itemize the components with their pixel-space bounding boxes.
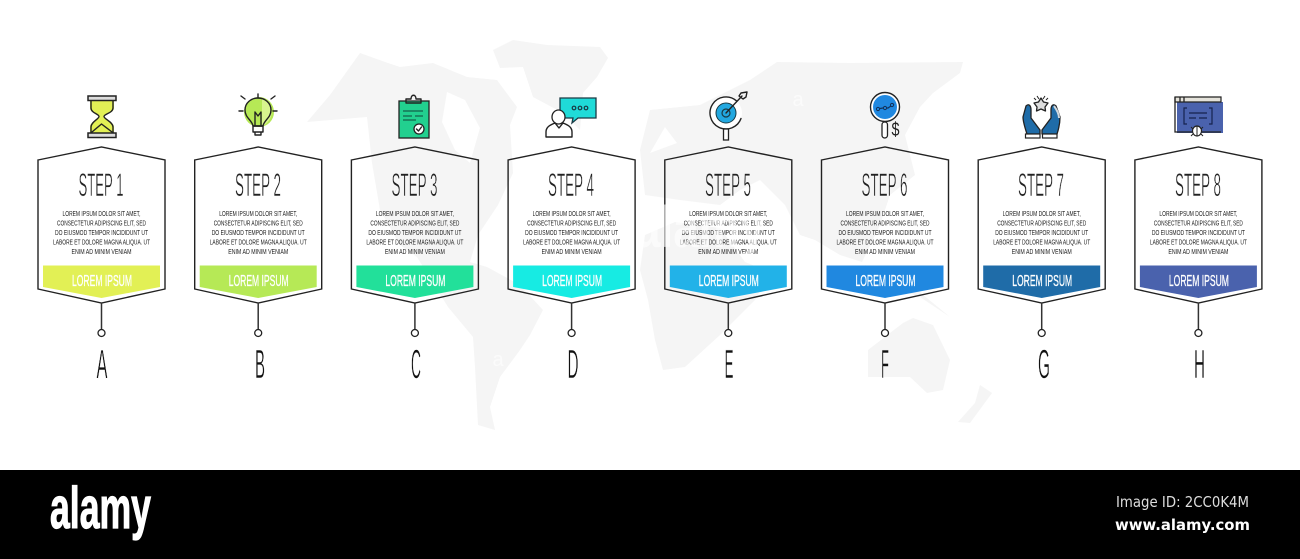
panel: step 6 bbox=[822, 147, 948, 387]
body text: LABORE ET DOLORE MAGNA ALIQUA. UT bbox=[210, 238, 307, 246]
body text: LOREM IPSUM DOLOR SIT AMET, bbox=[376, 209, 454, 218]
ribbon label: LOREM IPSUM bbox=[1012, 273, 1072, 290]
ribbon label: LOREM IPSUM bbox=[542, 273, 602, 290]
body text: DO EIUSMOD TEMPOR INCIDIDUNT UT bbox=[525, 228, 618, 237]
body text bbox=[210, 209, 307, 256]
ribbon bbox=[513, 266, 630, 298]
body text: CONSECTETUR ADIPISCING ELIT, SED bbox=[370, 218, 460, 228]
connector bbox=[411, 303, 418, 336]
body text bbox=[836, 209, 934, 256]
panel: step 4: STEP 4 bbox=[548, 167, 594, 203]
body text: CONSECTETUR ADIPISCING ELIT, SED bbox=[57, 218, 146, 228]
body text: LABORE ET DOLORE MAGNA ALIQUA. UT bbox=[1150, 238, 1247, 246]
world map bbox=[307, 40, 992, 430]
body text: LABORE ET DOLORE MAGNA ALIQUA. UT bbox=[523, 238, 620, 246]
footer logo: alamy bbox=[50, 476, 151, 541]
body text: LABORE ET DOLORE MAGNA ALIQUA. UT bbox=[680, 238, 777, 246]
body text: DO EIUSMOD TEMPOR INCIDIDUNT UT bbox=[838, 228, 932, 237]
ribbon label: LOREM IPSUM bbox=[699, 273, 759, 290]
hexagon card bbox=[351, 147, 478, 303]
panel: step 8 bbox=[1135, 147, 1262, 387]
panel: step 5 bbox=[665, 147, 792, 387]
body text bbox=[1150, 209, 1247, 256]
body text: CONSECTETUR ADIPISCING ELIT, SED bbox=[527, 218, 616, 228]
body text bbox=[366, 209, 464, 256]
body text: DO EIUSMOD TEMPOR INCIDIDUNT UT bbox=[1152, 228, 1245, 237]
ribbon bbox=[1140, 266, 1257, 298]
body text: CONSECTETUR ADIPISCING ELIT, SED bbox=[997, 218, 1087, 228]
body text: CONSECTETUR ADIPISCING ELIT, SED bbox=[214, 218, 303, 228]
connector bbox=[568, 303, 575, 336]
connector bbox=[98, 303, 105, 336]
hexagon card bbox=[822, 147, 948, 303]
panel: step 7: STEP 7 bbox=[1018, 167, 1064, 203]
body text: CONSECTETUR ADIPISCING ELIT, SED bbox=[840, 218, 930, 228]
icon: code window with bug bbox=[1175, 97, 1223, 136]
icon: hands with star bbox=[1023, 96, 1060, 138]
panel: step 1 bbox=[38, 147, 165, 387]
panel: step 4: D bbox=[568, 341, 578, 387]
icon: magnifier with dollar: $ bbox=[892, 120, 900, 141]
body text bbox=[53, 209, 150, 256]
connector bbox=[1195, 303, 1202, 336]
panel: step 8: H bbox=[1194, 341, 1205, 387]
hexagon card bbox=[508, 147, 635, 303]
panel: step 2: B bbox=[255, 341, 265, 387]
connector bbox=[255, 303, 262, 336]
body text: ENIM AD MINIM VENIAM bbox=[698, 247, 758, 256]
ribbon label: LOREM IPSUM bbox=[1169, 273, 1229, 290]
panel: step 1: STEP 1 bbox=[78, 167, 124, 203]
body text: LOREM IPSUM DOLOR SIT AMET, bbox=[62, 209, 140, 218]
ribbon label: LOREM IPSUM bbox=[229, 273, 289, 290]
body text: LABORE ET DOLORE MAGNA ALIQUA. UT bbox=[836, 238, 934, 246]
ribbon bbox=[670, 266, 787, 298]
connector bbox=[1038, 303, 1045, 336]
hexagon card bbox=[38, 147, 165, 303]
ribbon bbox=[200, 266, 317, 298]
hexagon card bbox=[1135, 147, 1262, 303]
panel: step 7 bbox=[978, 147, 1105, 387]
body text: DO EIUSMOD TEMPOR INCIDIDUNT UT bbox=[682, 228, 775, 237]
body text: LOREM IPSUM DOLOR SIT AMET, bbox=[846, 209, 924, 218]
body text: ENIM AD MINIM VENIAM bbox=[385, 247, 445, 256]
icon: person with speech bubble bbox=[546, 98, 596, 137]
body text: LOREM IPSUM DOLOR SIT AMET, bbox=[533, 209, 611, 218]
hexagon card bbox=[665, 147, 792, 303]
ribbon label: LOREM IPSUM bbox=[856, 273, 916, 290]
ribbon bbox=[983, 266, 1100, 298]
ribbon bbox=[43, 266, 160, 298]
body text: DO EIUSMOD TEMPOR INCIDIDUNT UT bbox=[995, 228, 1088, 237]
ribbon label: LOREM IPSUM bbox=[385, 273, 445, 290]
footer bar bbox=[0, 470, 1300, 559]
watermark: alamy bbox=[635, 195, 765, 260]
panel: step 2: STEP 2 bbox=[235, 167, 281, 203]
panel: step 7: G bbox=[1038, 341, 1050, 387]
panel: step 4 bbox=[508, 147, 635, 387]
icon: clipboard bbox=[399, 95, 429, 138]
panel: step 5: STEP 5 bbox=[705, 167, 751, 203]
ribbon bbox=[826, 266, 944, 298]
panel: step 2 bbox=[195, 147, 322, 387]
connector bbox=[725, 303, 732, 336]
website: www.alamy.com bbox=[1115, 516, 1250, 534]
body text: CONSECTETUR ADIPISCING ELIT, SED bbox=[684, 218, 773, 228]
body text bbox=[523, 209, 620, 256]
body text: DO EIUSMOD TEMPOR INCIDIDUNT UT bbox=[55, 228, 148, 237]
image id: Image ID: 2CC0K4M bbox=[1116, 493, 1249, 511]
body text: LABORE ET DOLORE MAGNA ALIQUA. UT bbox=[53, 238, 150, 246]
body text: ENIM AD MINIM VENIAM bbox=[72, 247, 132, 256]
body text: ENIM AD MINIM VENIAM bbox=[228, 247, 288, 256]
panel: step 6: F bbox=[881, 341, 889, 387]
panel: step 5: E bbox=[724, 341, 734, 387]
body text: ENIM AD MINIM VENIAM bbox=[1168, 247, 1228, 256]
watermark: a bbox=[492, 349, 504, 371]
body text: LABORE ET DOLORE MAGNA ALIQUA. UT bbox=[366, 238, 464, 246]
icon: magnifier with dollar bbox=[870, 92, 900, 141]
watermark bbox=[492, 89, 804, 371]
body text: LOREM IPSUM DOLOR SIT AMET, bbox=[1003, 209, 1081, 218]
panel: step 3: C bbox=[411, 341, 421, 387]
icon: light bulb bbox=[239, 94, 277, 135]
body text: LABORE ET DOLORE MAGNA ALIQUA. UT bbox=[993, 238, 1090, 246]
watermark: a bbox=[792, 89, 804, 111]
connector bbox=[882, 303, 888, 336]
body text: LOREM IPSUM DOLOR SIT AMET, bbox=[1159, 209, 1237, 218]
body text: DO EIUSMOD TEMPOR INCIDIDUNT UT bbox=[212, 228, 305, 237]
hexagon card bbox=[195, 147, 322, 303]
body text bbox=[993, 209, 1090, 256]
icon: target with arrow bbox=[710, 92, 747, 140]
panel: step 6: STEP 6 bbox=[862, 167, 908, 203]
panel: step 8: STEP 8 bbox=[1175, 167, 1221, 203]
body text: LOREM IPSUM DOLOR SIT AMET, bbox=[219, 209, 297, 218]
panel: step 3: STEP 3 bbox=[392, 167, 438, 203]
ribbon bbox=[356, 266, 473, 298]
body text bbox=[680, 209, 777, 256]
panel: step 1: A bbox=[96, 341, 108, 387]
icon: hourglass bbox=[88, 96, 116, 138]
ribbon label: LOREM IPSUM bbox=[72, 273, 132, 290]
body text: ENIM AD MINIM VENIAM bbox=[542, 247, 602, 256]
body text: CONSECTETUR ADIPISCING ELIT, SED bbox=[1154, 218, 1243, 228]
body text: ENIM AD MINIM VENIAM bbox=[855, 247, 915, 256]
body text: ENIM AD MINIM VENIAM bbox=[1012, 247, 1072, 256]
panel: step 3 bbox=[351, 147, 478, 387]
hexagon card bbox=[978, 147, 1105, 303]
body text: LOREM IPSUM DOLOR SIT AMET, bbox=[689, 209, 767, 218]
body text: DO EIUSMOD TEMPOR INCIDIDUNT UT bbox=[368, 228, 462, 237]
